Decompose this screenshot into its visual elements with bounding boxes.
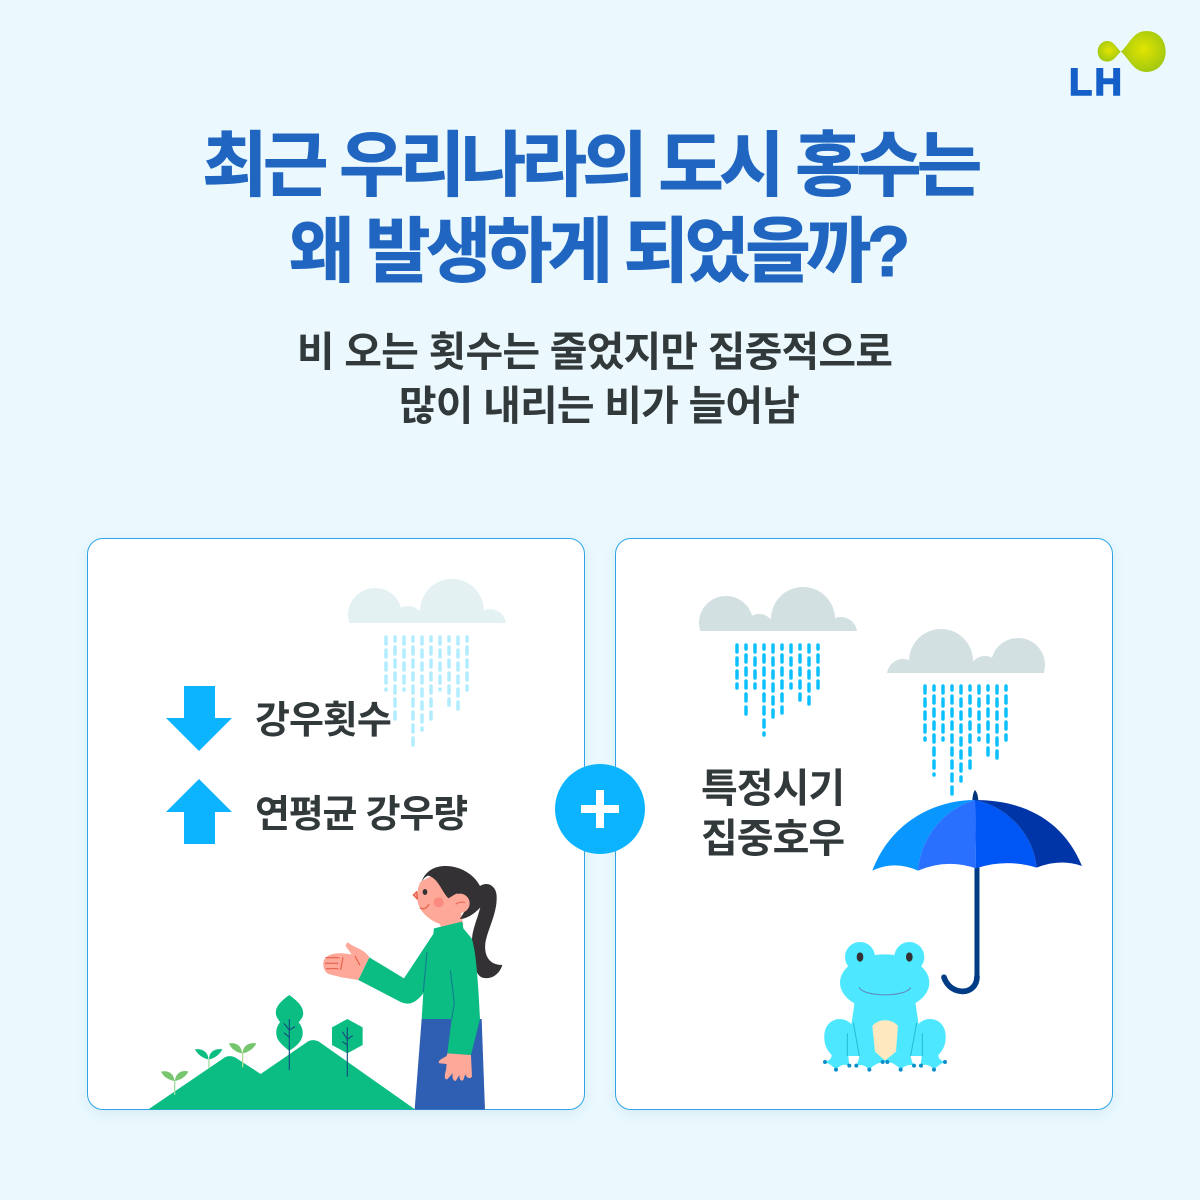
illustration: umbrella (872, 790, 1082, 991)
icon: down arrow (166, 686, 232, 751)
icon: pale cloud (348, 579, 506, 623)
icon: up arrow (166, 779, 232, 844)
icon: cloud 1 (699, 587, 857, 631)
label: annual rainfall: 연평균 강우량 (255, 794, 467, 836)
pale rain (386, 637, 467, 747)
subtitle line 1: 비 오는 횟수는 줄었지만 집중적으로 (297, 329, 892, 375)
label: concentrated rain: 집중호우 (701, 817, 844, 861)
illustration: frog (823, 942, 947, 1072)
panel: right (615, 538, 1113, 1110)
illustration: woman (323, 866, 502, 1110)
icon: LH logo: LH (1069, 62, 1122, 104)
icon: cloud 2 (887, 629, 1045, 673)
label: rainfall frequency: 강우횟수 (255, 700, 391, 742)
illustration: hills and plants (148, 995, 415, 1109)
subtitle line 2: 많이 내리는 비가 늘어남 (399, 383, 799, 429)
rain 2 (925, 686, 1006, 797)
icon: LH logo (1069, 31, 1166, 104)
title line 2: 왜 발생하게 되었을까? (289, 213, 906, 292)
label: concentrated rain: 특정시기 (701, 767, 844, 811)
panel: left (87, 538, 585, 1110)
icon: plus badge (555, 764, 645, 854)
label: concentrated rain (701, 767, 844, 861)
rain 1 (737, 645, 818, 735)
title line 1: 최근 우리나라의 도시 홍수는 (202, 127, 978, 206)
